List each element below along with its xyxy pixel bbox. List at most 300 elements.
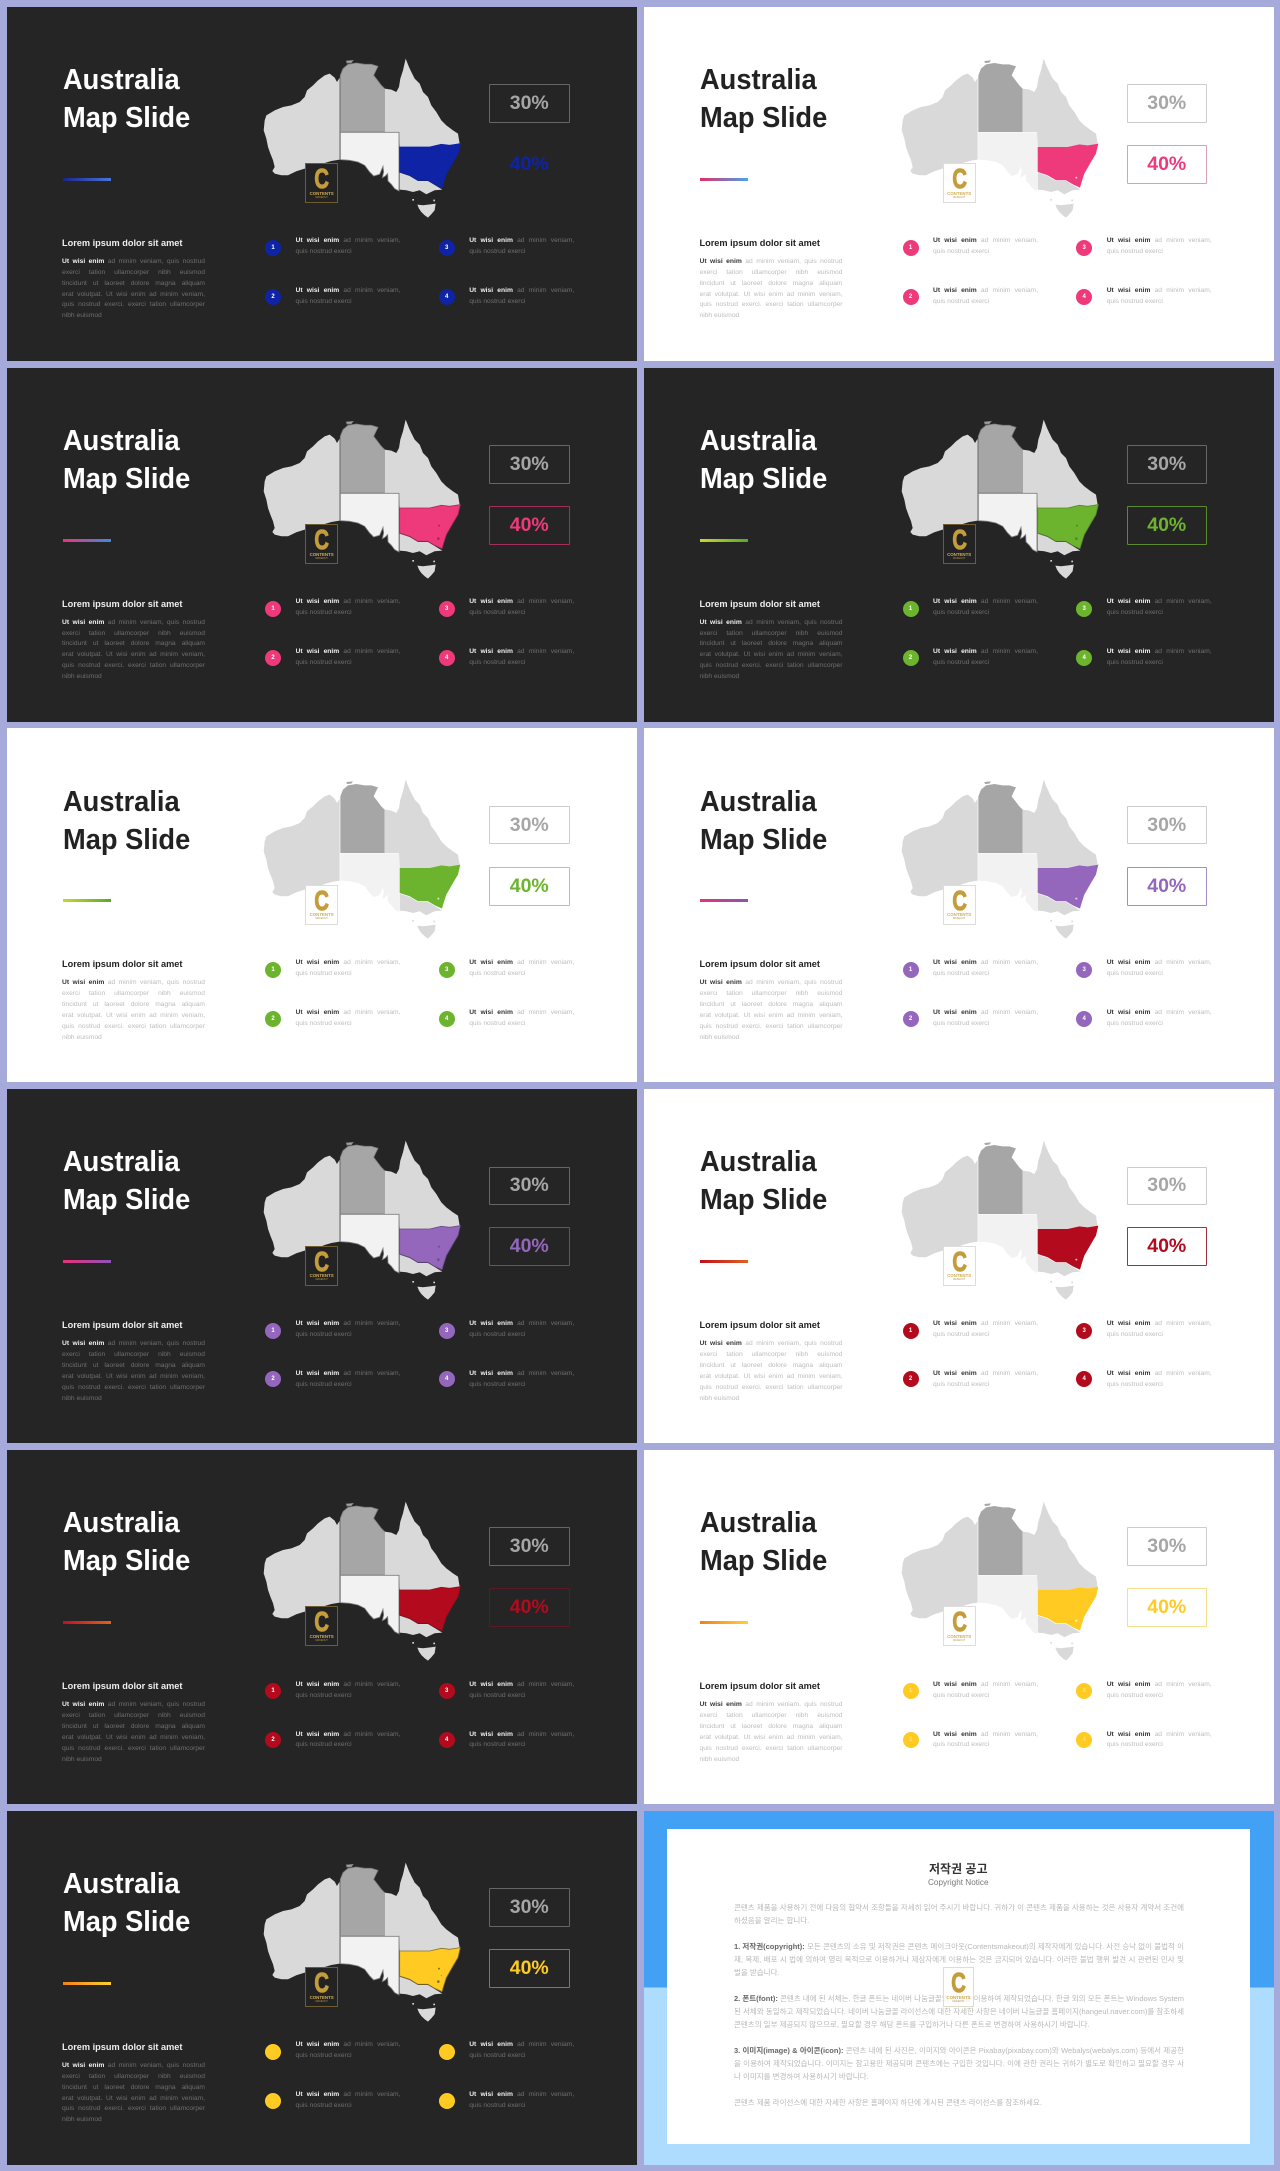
accent line [62, 538, 110, 542]
bullet 1: 1 [271, 2049, 275, 2055]
bullet 1: Ut wisi enim ad minim veniam, [933, 1320, 1038, 1327]
slide 2: white pink [644, 7, 1274, 361]
title: Map Slide [700, 463, 827, 495]
title: Map Slide [700, 1545, 827, 1577]
stat 30% [1126, 445, 1207, 484]
body text: erat volutpat. Ut wisi enim ad minim veniam, [62, 291, 205, 298]
bullet 2: Ut wisi enim ad minim veniam, [296, 287, 400, 294]
map of Australia [263, 1861, 463, 2024]
bullet 4 [1076, 1008, 1212, 1030]
stat 30%: 30% [510, 1896, 549, 1918]
body text: quis nostrud exerci. exerci tation ullamcorper [62, 2105, 205, 2112]
slide 12: copyright notice [644, 1811, 1274, 2165]
stat 40% [1126, 1227, 1207, 1266]
bullet 4: quis nostrud exerci [469, 2102, 525, 2109]
title [700, 1504, 827, 1580]
bullet 4 [1076, 1730, 1212, 1752]
title: Australia [62, 1868, 179, 1900]
bullet 2: 2 [271, 1016, 275, 1022]
bullet 2: 2 [271, 2098, 275, 2104]
bullet 4: 4 [1083, 655, 1086, 661]
bullet 3 [439, 1319, 575, 1341]
body text [62, 1339, 205, 1405]
bullet 3: quis nostrud exerci [469, 248, 525, 255]
bullet 3 [1076, 1680, 1212, 1702]
body text: exerci tation ullamcorper nibh euismod [62, 1351, 205, 1358]
heading: Lorem ipsum dolor sit amet [62, 2042, 182, 2052]
logo badge: CONTENTS [947, 191, 971, 196]
bullet 3 [439, 959, 574, 978]
title: Australia [700, 425, 817, 457]
logo badge: C [952, 1246, 966, 1277]
bullet 1: 1 [909, 606, 912, 612]
bullet 4: 4 [445, 2098, 448, 2104]
title [62, 1504, 190, 1580]
bullet 1: 1 [909, 1688, 912, 1694]
body text: exerci tation ullamcorper nibh euismod [700, 630, 842, 637]
body text: erat volutpat. Ut wisi enim ad minim veniam, [700, 651, 842, 658]
bullet 1: quis nostrud exerci [296, 2052, 352, 2059]
bullet 3: 3 [1083, 245, 1086, 251]
bullet 4 [439, 2090, 575, 2112]
body text: Ut wisi enim ad minim veniam, quis nostrud [62, 979, 205, 986]
bullet 2: Ut wisi enim ad minim veniam, [296, 1731, 400, 1738]
bullet 3: Ut wisi enim ad minim veniam, [469, 1681, 574, 1688]
logo badge: CONTENTS [947, 1634, 971, 1639]
bullet 4: quis nostrud exerci [1107, 1741, 1163, 1748]
heading: Lorem ipsum dolor sit amet [62, 1320, 182, 1330]
bullet 1: Ut wisi enim ad minim veniam, [296, 1681, 400, 1688]
bullet 4: Ut wisi enim ad minim veniam, [469, 1731, 574, 1738]
bullet 3: quis nostrud exerci [1107, 1692, 1163, 1699]
bullet 4: Ut wisi enim ad minim veniam, [1107, 1731, 1212, 1738]
body text [700, 258, 842, 319]
body text: tincidunt ut laoreet dolore magna aliquam [62, 1362, 205, 1369]
slide 9: dark red [6, 1450, 636, 1804]
bullet 3 [439, 2040, 575, 2062]
title [62, 64, 190, 134]
bullet 4: quis nostrud exerci [469, 298, 525, 305]
body text: Ut wisi enim ad minim veniam, quis nostrud [62, 258, 205, 265]
map of Australia [902, 59, 1098, 218]
bullet 1 [265, 1680, 401, 1702]
bullet 2: quis nostrud exerci [933, 1381, 989, 1388]
title: Map Slide [62, 1545, 190, 1577]
notice title: 저작권 공고 [929, 1862, 988, 1876]
bullet 2: 2 [271, 1376, 275, 1382]
body text: nibh euismod [62, 1395, 102, 1402]
body text: Ut wisi enim ad minim veniam, quis nostrud [700, 258, 842, 265]
bullet 1: Ut wisi enim ad minim veniam, [296, 237, 400, 244]
logo badge [305, 885, 338, 925]
title [700, 1143, 827, 1219]
bullet 1 [265, 959, 400, 978]
title: Australia [62, 1507, 179, 1539]
body text: tincidunt ut laoreet dolore magna aliquam [62, 280, 205, 287]
bullet 1: 1 [909, 967, 912, 973]
bullet 2 [903, 648, 1038, 666]
logo badge [305, 163, 338, 203]
body text [62, 2061, 205, 2126]
body text: erat volutpat. Ut wisi enim ad minim veniam, [700, 1734, 842, 1741]
bullet 4: 4 [445, 1737, 448, 1743]
logo badge: CONTENTS [310, 1634, 334, 1639]
body text: quis nostrud exerci. exerci tation ullamcorper [62, 1023, 205, 1030]
logo badge: MAKEOUT [315, 2000, 328, 2003]
copyright clause: 벌을 받습니다. [734, 1968, 780, 1977]
title: Map Slide [700, 1184, 827, 1216]
bullet 3: quis nostrud exerci [469, 609, 525, 616]
body text: quis nostrud exerci. exerci tation ullamcorper [62, 1745, 205, 1752]
bullet 1: quis nostrud exerci [296, 1331, 352, 1338]
white notice card [666, 1829, 1250, 2144]
stat 40%: 40% [510, 1596, 549, 1618]
title: Map Slide [700, 102, 827, 134]
bullet 3: Ut wisi enim ad minim veniam, [1107, 1320, 1212, 1327]
body text: Ut wisi enim ad minim veniam, quis nostrud [62, 1340, 205, 1347]
bullet 3: 3 [1083, 1328, 1086, 1334]
stat 30% [489, 1888, 570, 1927]
stat 30% [489, 1527, 570, 1566]
logo badge [942, 1246, 976, 1286]
bullet 1: 1 [271, 245, 275, 251]
body text: nibh euismod [62, 673, 102, 680]
bullet 4: quis nostrud exerci [469, 659, 525, 666]
bullet 2: quis nostrud exerci [933, 298, 989, 305]
logo badge: CONTENTS [947, 1273, 971, 1278]
map of Australia [263, 1139, 463, 1302]
notice subtitle: Copyright Notice [928, 1878, 989, 1887]
map of Australia [901, 1139, 1101, 1302]
bullet 3 [439, 598, 574, 617]
intro paragraph [734, 1901, 1184, 1927]
title [700, 64, 827, 134]
stat 30%: 30% [510, 1174, 549, 1196]
bullet 1: Ut wisi enim ad minim veniam, [296, 2041, 400, 2048]
logo badge: C [314, 885, 329, 916]
bullet 1: quis nostrud exerci [933, 609, 989, 616]
bullet 4: quis nostrud exerci [469, 1020, 525, 1027]
heading: Lorem ipsum dolor sit amet [700, 598, 820, 608]
bullet 3: quis nostrud exerci [1107, 1331, 1163, 1338]
bullet 2 [265, 2090, 401, 2112]
body text: tincidunt ut laoreet dolore magna aliquam [62, 1723, 205, 1730]
body text: nibh euismod [62, 1034, 102, 1041]
title: Australia [700, 1146, 817, 1178]
logo badge: MAKEOUT [315, 196, 328, 199]
bullet 2: quis nostrud exerci [296, 659, 352, 666]
accent line [62, 1260, 110, 1263]
stat 30% [1126, 806, 1207, 844]
title: Australia [700, 1507, 817, 1539]
body text [62, 979, 205, 1041]
stat 30%: 30% [1147, 453, 1186, 475]
stat 30%: 30% [510, 1535, 549, 1557]
bullet 1: Ut wisi enim ad minim veniam, [933, 959, 1038, 966]
logo badge: CONTENTS [947, 552, 971, 557]
accent line [62, 1621, 110, 1624]
bullet 2: Ut wisi enim ad minim veniam, [296, 2091, 400, 2098]
bullet 3: 3 [445, 606, 448, 612]
bullet 1: 1 [271, 967, 275, 973]
bullet 4: quis nostrud exerci [1107, 1381, 1163, 1388]
bullet 2: Ut wisi enim ad minim veniam, [296, 648, 400, 655]
bullet 2: Ut wisi enim ad minim veniam, [933, 1370, 1038, 1377]
bullet 3: Ut wisi enim ad minim veniam, [469, 959, 574, 966]
bullet 2: 2 [909, 1737, 912, 1743]
bullet 4: 4 [445, 1016, 448, 1022]
bullet 1: 1 [909, 1328, 912, 1334]
bullet 1: quis nostrud exerci [933, 1331, 989, 1338]
bullet 3: 3 [445, 245, 448, 251]
bullet 1: quis nostrud exerci [296, 609, 352, 616]
bullet 3: Ut wisi enim ad minim veniam, [1107, 237, 1212, 244]
logo badge: C [314, 1246, 329, 1277]
heading: Lorem ipsum dolor sit amet [700, 238, 820, 248]
bullet 3 [1076, 598, 1212, 617]
logo badge: C [952, 163, 966, 194]
bullet 1: quis nostrud exerci [933, 248, 989, 255]
logo badge: MAKEOUT [315, 1639, 328, 1642]
body text [700, 1339, 842, 1405]
copyright clause [734, 1940, 1184, 1979]
stat 30%: 30% [510, 92, 549, 114]
body text: nibh euismod [62, 2116, 102, 2123]
image clause: 나 이미지를 변경하여 사용하시기 바랍니다. [734, 2072, 869, 2081]
stat 40% [1126, 867, 1207, 906]
bullet 2: quis nostrud exerci [296, 1381, 352, 1388]
body text: tincidunt ut laoreet dolore magna aliquam [62, 2084, 205, 2091]
logo badge: CONTENTS [310, 912, 334, 917]
bullet 3: quis nostrud exerci [1107, 609, 1163, 616]
bullet 2: 2 [909, 1016, 912, 1022]
bullet 3: 3 [445, 1328, 448, 1334]
stat 40%: 40% [1147, 1235, 1186, 1257]
slide 6: white purple [644, 728, 1274, 1082]
map of Australia [264, 780, 460, 938]
heading: Lorem ipsum dolor sit amet [62, 1681, 182, 1691]
body text: nibh euismod [62, 312, 102, 319]
bullet 1: quis nostrud exerci [296, 970, 352, 977]
title: Australia [700, 64, 817, 96]
intro paragraph: 하셨음을 알리는 합니다. [734, 1916, 809, 1925]
stat 30% [489, 445, 570, 484]
stat 40% [489, 1588, 570, 1627]
accent line [700, 899, 748, 902]
slide 7: dark purple [6, 1089, 636, 1443]
stat 30%: 30% [1147, 1174, 1186, 1196]
bullet 3: 3 [1083, 1688, 1086, 1694]
bullet 4: 4 [1083, 294, 1086, 300]
body text: tincidunt ut laoreet dolore magna aliquam [62, 1001, 205, 1008]
title: Map Slide [62, 824, 190, 856]
bullet 1: quis nostrud exerci [296, 248, 352, 255]
logo badge: MAKEOUT [315, 917, 328, 920]
font clause [734, 1992, 1184, 2031]
body text [62, 258, 205, 319]
bullet 4: 4 [1083, 1737, 1086, 1743]
stat 40% [489, 867, 570, 906]
stat 40% [489, 506, 570, 545]
bullet 2: 2 [909, 655, 912, 661]
bullet 2 [265, 648, 400, 666]
bullet 3 [1076, 958, 1212, 980]
heading: Lorem ipsum dolor sit amet [62, 959, 182, 969]
bullet 3: quis nostrud exerci [1107, 970, 1163, 977]
bullet 1: Ut wisi enim ad minim veniam, [296, 1320, 400, 1327]
stat 40%: 40% [1147, 875, 1186, 897]
title: Australia [62, 64, 179, 96]
bullet 3: quis nostrud exerci [469, 970, 525, 977]
bullet 3 [439, 237, 574, 256]
bullet 2 [903, 287, 1038, 305]
logo badge: C [952, 885, 966, 916]
bullet 2: 2 [909, 294, 912, 300]
bullet 3: quis nostrud exerci [469, 1331, 525, 1338]
bullet 3: quis nostrud exerci [469, 2052, 525, 2059]
bullet 2: quis nostrud exerci [296, 298, 352, 305]
body text: Ut wisi enim ad minim veniam, quis nostrud [62, 2062, 205, 2069]
stat 40%: 40% [510, 875, 549, 897]
body text: quis nostrud exerci. exerci tation ullamcorper [62, 301, 205, 308]
body text: Ut wisi enim ad minim veniam, quis nostrud [62, 1701, 205, 1708]
slide 8: white red [644, 1089, 1274, 1443]
title: Australia [62, 1146, 179, 1178]
bullet 4: Ut wisi enim ad minim veniam, [1107, 287, 1212, 294]
heading: Lorem ipsum dolor sit amet [700, 1681, 820, 1691]
body text: quis nostrud exerci. exerci tation ullamcorper [62, 662, 205, 669]
bullet 2 [265, 1009, 400, 1027]
stat 40% [1126, 1588, 1207, 1627]
slide 3: dark pink [6, 368, 636, 722]
body text: Ut wisi enim ad minim veniam, quis nostrud [700, 1701, 842, 1708]
bullet 3 [439, 1680, 575, 1702]
bullet 2: quis nostrud exerci [296, 2102, 352, 2109]
bullet 4 [1076, 287, 1212, 305]
logo badge [305, 1606, 338, 1646]
bullet 3: Ut wisi enim ad minim veniam, [1107, 1681, 1212, 1688]
bullet 4: Ut wisi enim ad minim veniam, [469, 648, 574, 655]
stat 30%: 30% [510, 453, 549, 475]
logo badge: C [952, 1606, 966, 1637]
stat 30% [1126, 1167, 1207, 1205]
stat 30% [1126, 1527, 1207, 1566]
logo badge: C [314, 163, 329, 194]
logo badge [943, 1967, 974, 2007]
body text: tincidunt ut laoreet dolore magna aliquam [700, 640, 842, 647]
slide 1: dark blue [6, 7, 636, 361]
bullet 4 [439, 1369, 575, 1391]
logo badge: MAKEOUT [315, 1278, 328, 1281]
bullet 1 [265, 2040, 401, 2062]
bullet 1: Ut wisi enim ad minim veniam, [296, 598, 400, 605]
bullet 2: quis nostrud exerci [296, 1020, 352, 1027]
body text: erat volutpat. Ut wisi enim ad minim veniam, [700, 1373, 842, 1380]
body text: quis nostrud exerci. exerci tation ullamcorper [700, 1023, 842, 1030]
body text: Ut wisi enim ad minim veniam, quis nostrud [700, 979, 842, 986]
logo badge: C [951, 1967, 966, 1998]
bullet 1 [903, 237, 1038, 256]
bullet 4: 4 [445, 294, 448, 300]
bullet 1 [902, 1319, 1038, 1341]
stat 40%: 40% [1147, 153, 1186, 175]
body text [700, 1700, 842, 1765]
bullet 1 [902, 1680, 1038, 1702]
bullet 2: 2 [271, 655, 275, 661]
stat 40%: 40% [510, 514, 549, 536]
body text: erat volutpat. Ut wisi enim ad minim veniam, [700, 291, 842, 298]
bullet 4: Ut wisi enim ad minim veniam, [1107, 648, 1212, 655]
body text [62, 619, 205, 680]
accent line [700, 1621, 748, 1624]
title: Map Slide [62, 463, 190, 495]
accent line [62, 899, 110, 902]
body text: tincidunt ut laoreet dolore magna aliquam [62, 640, 205, 647]
title [62, 425, 190, 495]
body text: nibh euismod [700, 312, 739, 319]
body text: quis nostrud exerci. exerci tation ullamcorper [700, 662, 842, 669]
bullet 2: quis nostrud exerci [933, 1020, 989, 1027]
bullet 2: quis nostrud exerci [933, 659, 989, 666]
logo badge: MAKEOUT [953, 196, 965, 199]
stat 40% [489, 145, 570, 184]
body text: erat volutpat. Ut wisi enim ad minim veniam, [62, 2095, 205, 2102]
bullet 4 [1076, 648, 1212, 666]
map of Australia [901, 1500, 1101, 1663]
slide 4: dark green [644, 368, 1274, 722]
bullet 1: Ut wisi enim ad minim veniam, [933, 1681, 1038, 1688]
body text: quis nostrud exerci. exerci tation ullamcorper [700, 1745, 842, 1752]
body text: nibh euismod [700, 673, 739, 680]
bullet 4: 4 [1083, 1376, 1086, 1382]
body text: Ut wisi enim ad minim veniam, quis nostrud [700, 1340, 842, 1347]
bullet 1: quis nostrud exerci [296, 1692, 352, 1699]
logo badge: CONTENTS [310, 1995, 334, 2000]
slide 10: white yellow [644, 1450, 1274, 1804]
bullet 1: quis nostrud exerci [933, 970, 989, 977]
bullet 4: Ut wisi enim ad minim veniam, [469, 1009, 574, 1016]
bullet 3: 3 [1083, 967, 1086, 973]
font clause: 콘텐츠의 일부 제공되지 않으므로, 필요할 경우 해당 폰트를 구입하거나 다른 폰트로 변경하여 사용하시기 바랍니다. [734, 2020, 1090, 2029]
bullet 1 [265, 237, 400, 256]
closing line: 콘텐츠 제품 라이선스에 대한 자세한 사항은 홈페이지 하단에 게시된 콘텐츠 라이선스를 참조하세요. [734, 2098, 1042, 2107]
logo badge: CONTENTS [310, 191, 334, 196]
logo badge [942, 1606, 976, 1646]
body text: nibh euismod [700, 1756, 739, 1763]
heading: Lorem ipsum dolor sit amet [700, 959, 820, 969]
accent line [700, 178, 748, 181]
bullet 2: 2 [271, 294, 275, 300]
image clause [734, 2044, 1184, 2083]
stat 40% [1126, 506, 1207, 545]
bullet 1 [903, 598, 1038, 617]
bullet 4: quis nostrud exerci [469, 1381, 525, 1388]
stat 30%: 30% [510, 814, 549, 836]
title [700, 786, 827, 856]
bullet 4 [439, 648, 574, 666]
body text: erat volutpat. Ut wisi enim ad minim veniam, [62, 1012, 205, 1019]
body text: exerci tation ullamcorper nibh euismod [62, 269, 205, 276]
stat 30% [489, 1167, 570, 1205]
accent line [700, 538, 748, 542]
body text: erat volutpat. Ut wisi enim ad minim veniam, [700, 1012, 842, 1019]
body text: quis nostrud exerci. exerci tation ullamcorper [700, 301, 842, 308]
logo badge: MAKEOUT [953, 1639, 965, 1642]
logo badge: CONTENTS [946, 1995, 971, 2000]
title: Map Slide [62, 1906, 190, 1938]
bullet 2: 2 [909, 1376, 912, 1382]
bullet 4 [439, 1730, 575, 1752]
